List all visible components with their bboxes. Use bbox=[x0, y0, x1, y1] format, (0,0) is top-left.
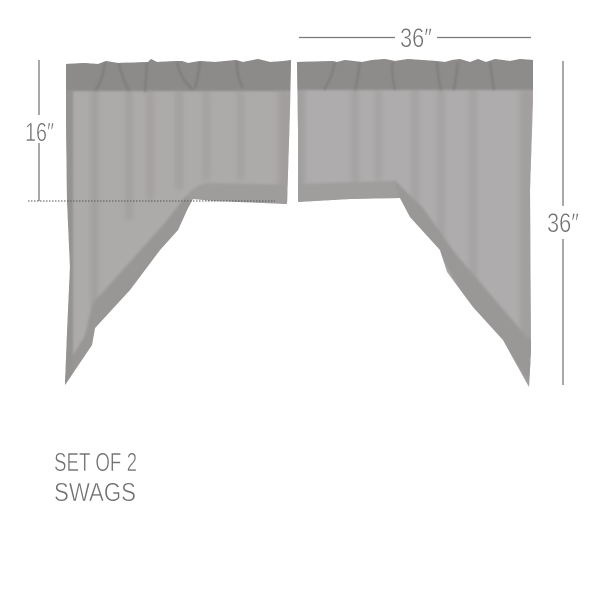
left curtain folds bbox=[91, 90, 292, 330]
right curtain panel bbox=[297, 59, 533, 387]
swag curtain diagram bbox=[26, 28, 578, 501]
right curtain diagonal hem bbox=[397, 184, 531, 381]
right curtain header band bbox=[297, 59, 533, 91]
left curtain header band bbox=[66, 59, 291, 92]
left curtain diagonal hem bbox=[65, 198, 190, 385]
left curtain panel bbox=[65, 59, 291, 385]
right curtain folds bbox=[292, 88, 534, 388]
left curtain left edge bbox=[65, 91, 74, 385]
label: set of 2 swags: SET OF 2 bbox=[54, 447, 137, 477]
label: set of 2 swags bbox=[54, 447, 137, 507]
right curtain bottom hem bbox=[298, 181, 403, 204]
right curtain gathers bbox=[324, 62, 494, 90]
label: set of 2 swags: SWAGS bbox=[54, 477, 136, 507]
left curtain bottom hem bbox=[187, 183, 288, 210]
dimension: 36 inch width: 36″ bbox=[400, 23, 432, 53]
dimension: 16 inch drop: 16″ bbox=[25, 117, 54, 147]
left curtain gathers bbox=[95, 60, 243, 92]
dimension: 36 inch length: 36″ bbox=[547, 208, 579, 238]
